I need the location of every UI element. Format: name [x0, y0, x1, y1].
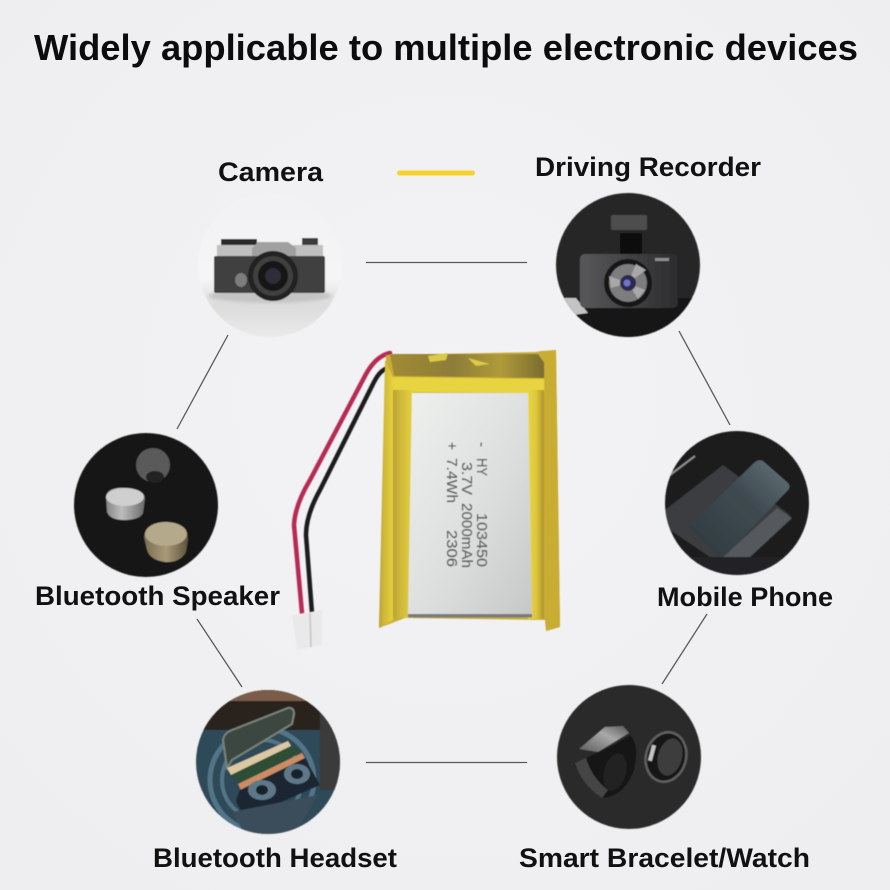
battery printed text: -	[473, 442, 490, 447]
label: Bluetooth Speaker: Bluetooth Speaker	[35, 581, 281, 611]
label: Camera: Camera	[218, 157, 324, 187]
label: Mobile Phone: Mobile Phone	[657, 582, 833, 612]
icon: bluetooth speaker photo	[74, 433, 218, 577]
battery printed text: 7.4Wh	[443, 458, 460, 503]
battery printed text: 3.7V	[458, 462, 475, 495]
battery wires	[294, 353, 390, 613]
label: Driving Recorder: Driving Recorder	[535, 152, 762, 182]
battery foil body	[379, 350, 560, 631]
label: Smart Bracelet/Watch: Smart Bracelet/Watch	[519, 843, 810, 873]
icon: camera photo	[204, 238, 336, 336]
connector: headset to bracelet	[366, 762, 527, 764]
battery printed text: 2000mAh	[458, 503, 475, 568]
label: Bluetooth Headset: Bluetooth Headset	[153, 843, 397, 873]
battery	[292, 350, 560, 650]
battery printed text: 103450	[473, 513, 490, 567]
connector: driving recorder to phone	[679, 331, 730, 425]
icon: bluetooth headset photo	[196, 690, 340, 834]
battery printed text: +	[443, 442, 460, 450]
battery printed text: HY	[473, 458, 490, 476]
icon: smart bracelet and watch photo	[557, 685, 701, 829]
battery printed text	[443, 442, 490, 568]
connector: camera to driving recorder	[366, 262, 527, 264]
battery connector	[292, 610, 322, 650]
title: Widely applicable to multiple electronic devices	[34, 27, 858, 68]
connector: speaker to headset	[197, 619, 242, 687]
battery printed text: 2306	[443, 530, 460, 567]
connector: camera to speaker	[177, 335, 228, 429]
icon: mobile phone photo	[665, 431, 811, 577]
icon: driving recorder photo	[555, 193, 701, 340]
connector: phone to bracelet	[662, 614, 707, 684]
yellow accent line	[397, 170, 475, 176]
